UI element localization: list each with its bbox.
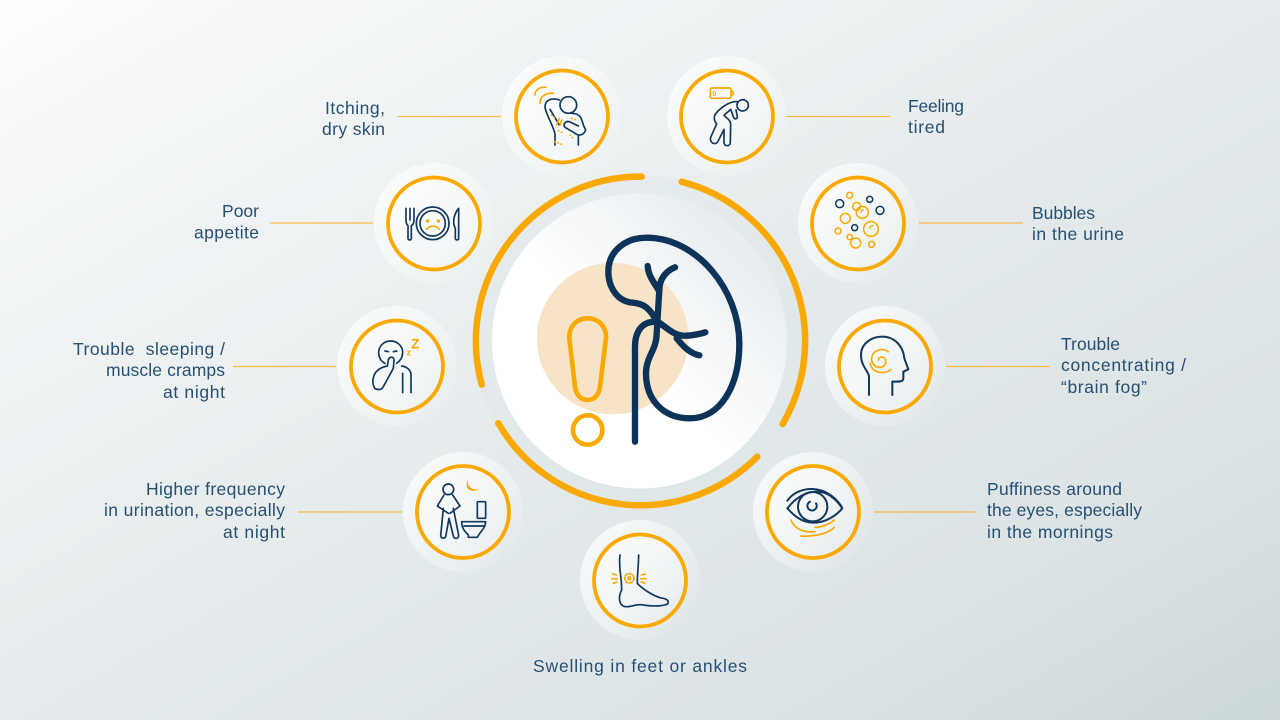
- connector: [233, 366, 336, 368]
- label: Bubbles: [1032, 203, 1095, 223]
- connector: [270, 222, 373, 224]
- label: Feeling: [908, 96, 964, 116]
- label: Itching,: [325, 98, 385, 118]
- icon: head with spiral: [861, 337, 908, 395]
- label: [322, 98, 385, 139]
- tan circle behind kidney: [537, 263, 688, 414]
- label: the eyes, especially: [987, 500, 1142, 520]
- ring: [839, 320, 931, 412]
- ring: [767, 466, 859, 558]
- halo disc: [753, 452, 873, 572]
- symptom: puffy eyes: [753, 452, 1142, 572]
- connector: [874, 511, 975, 513]
- icon: exclamation mark: [569, 318, 606, 445]
- connector: [919, 222, 1023, 224]
- halo disc: [337, 306, 457, 426]
- halo disc: [667, 56, 787, 176]
- label: [1032, 203, 1124, 244]
- connector: [786, 116, 890, 118]
- icon: yawning person: Z: [411, 335, 420, 351]
- orange ring: left arc: [476, 177, 642, 384]
- symptom: poor appetite: [194, 163, 494, 283]
- hub soft band: [474, 175, 806, 507]
- ring: [594, 534, 686, 626]
- halo disc: [403, 452, 523, 572]
- symptom: frequent urination: [104, 452, 523, 572]
- label: [104, 479, 285, 542]
- connector: [946, 366, 1050, 368]
- halo disc: [502, 56, 622, 176]
- icon: swollen ankle: [612, 555, 668, 607]
- hub white disc: [492, 194, 787, 488]
- label: tired: [908, 117, 945, 137]
- icon: kidney: [608, 238, 739, 442]
- icon: scratching person: [535, 87, 586, 145]
- label: appetite: [194, 222, 259, 242]
- icon: tired person with empty battery: [710, 88, 748, 146]
- icon: yawning person: [373, 335, 420, 393]
- halo disc: [825, 306, 945, 426]
- symptom: itching, dry skin: [322, 56, 622, 176]
- label: [1061, 334, 1186, 397]
- orange ring: bottom arc: [498, 423, 757, 505]
- symptom: bubbles in the urine: [798, 163, 1124, 283]
- label: Puffiness around: [987, 479, 1122, 499]
- label: Poor: [222, 201, 259, 221]
- central kidney hub: [474, 175, 806, 507]
- label: Higher frequency: [146, 479, 285, 499]
- ring: [351, 320, 443, 412]
- label: at night: [163, 382, 225, 402]
- label: in urination, especially: [104, 500, 285, 520]
- symptom: swelling in feet or ankles: [533, 520, 747, 676]
- ring: [812, 178, 904, 270]
- halo disc: [580, 520, 700, 640]
- icon: tired person with empty battery: 0: [712, 91, 716, 98]
- icon: yawning person: z: [406, 347, 411, 357]
- label: at night: [223, 522, 285, 542]
- connector: [397, 116, 501, 118]
- ring: [681, 70, 773, 162]
- ring: [516, 70, 608, 162]
- symptom: trouble sleeping: [73, 306, 457, 426]
- ring: [417, 466, 509, 558]
- symptom: feeling tired: [667, 56, 964, 176]
- halo disc: [798, 163, 918, 283]
- halo disc: [374, 163, 494, 283]
- connector: [298, 511, 402, 513]
- label: [73, 339, 225, 402]
- label: “brain fog”: [1061, 377, 1147, 397]
- label: Trouble: [1061, 334, 1120, 354]
- label: concentrating /: [1061, 355, 1186, 375]
- label: Trouble sleeping /: [73, 339, 225, 359]
- icon: eye with puffiness: [787, 489, 842, 536]
- label: [194, 201, 259, 242]
- label: in the urine: [1032, 224, 1124, 244]
- ring: [388, 178, 480, 270]
- label: [987, 479, 1142, 542]
- label: dry skin: [322, 119, 385, 139]
- label: Swelling in feet or ankles: [533, 656, 747, 676]
- symptom: trouble concentrating: [825, 306, 1186, 426]
- label: in the mornings: [987, 522, 1113, 542]
- label: [908, 96, 964, 137]
- orange ring: right arc: [682, 182, 805, 424]
- icon: sad plate with cutlery: [406, 207, 459, 240]
- label: muscle cramps: [106, 360, 225, 380]
- icon: person, toilet and moon: [437, 479, 486, 538]
- icon: bubbles: [835, 192, 884, 248]
